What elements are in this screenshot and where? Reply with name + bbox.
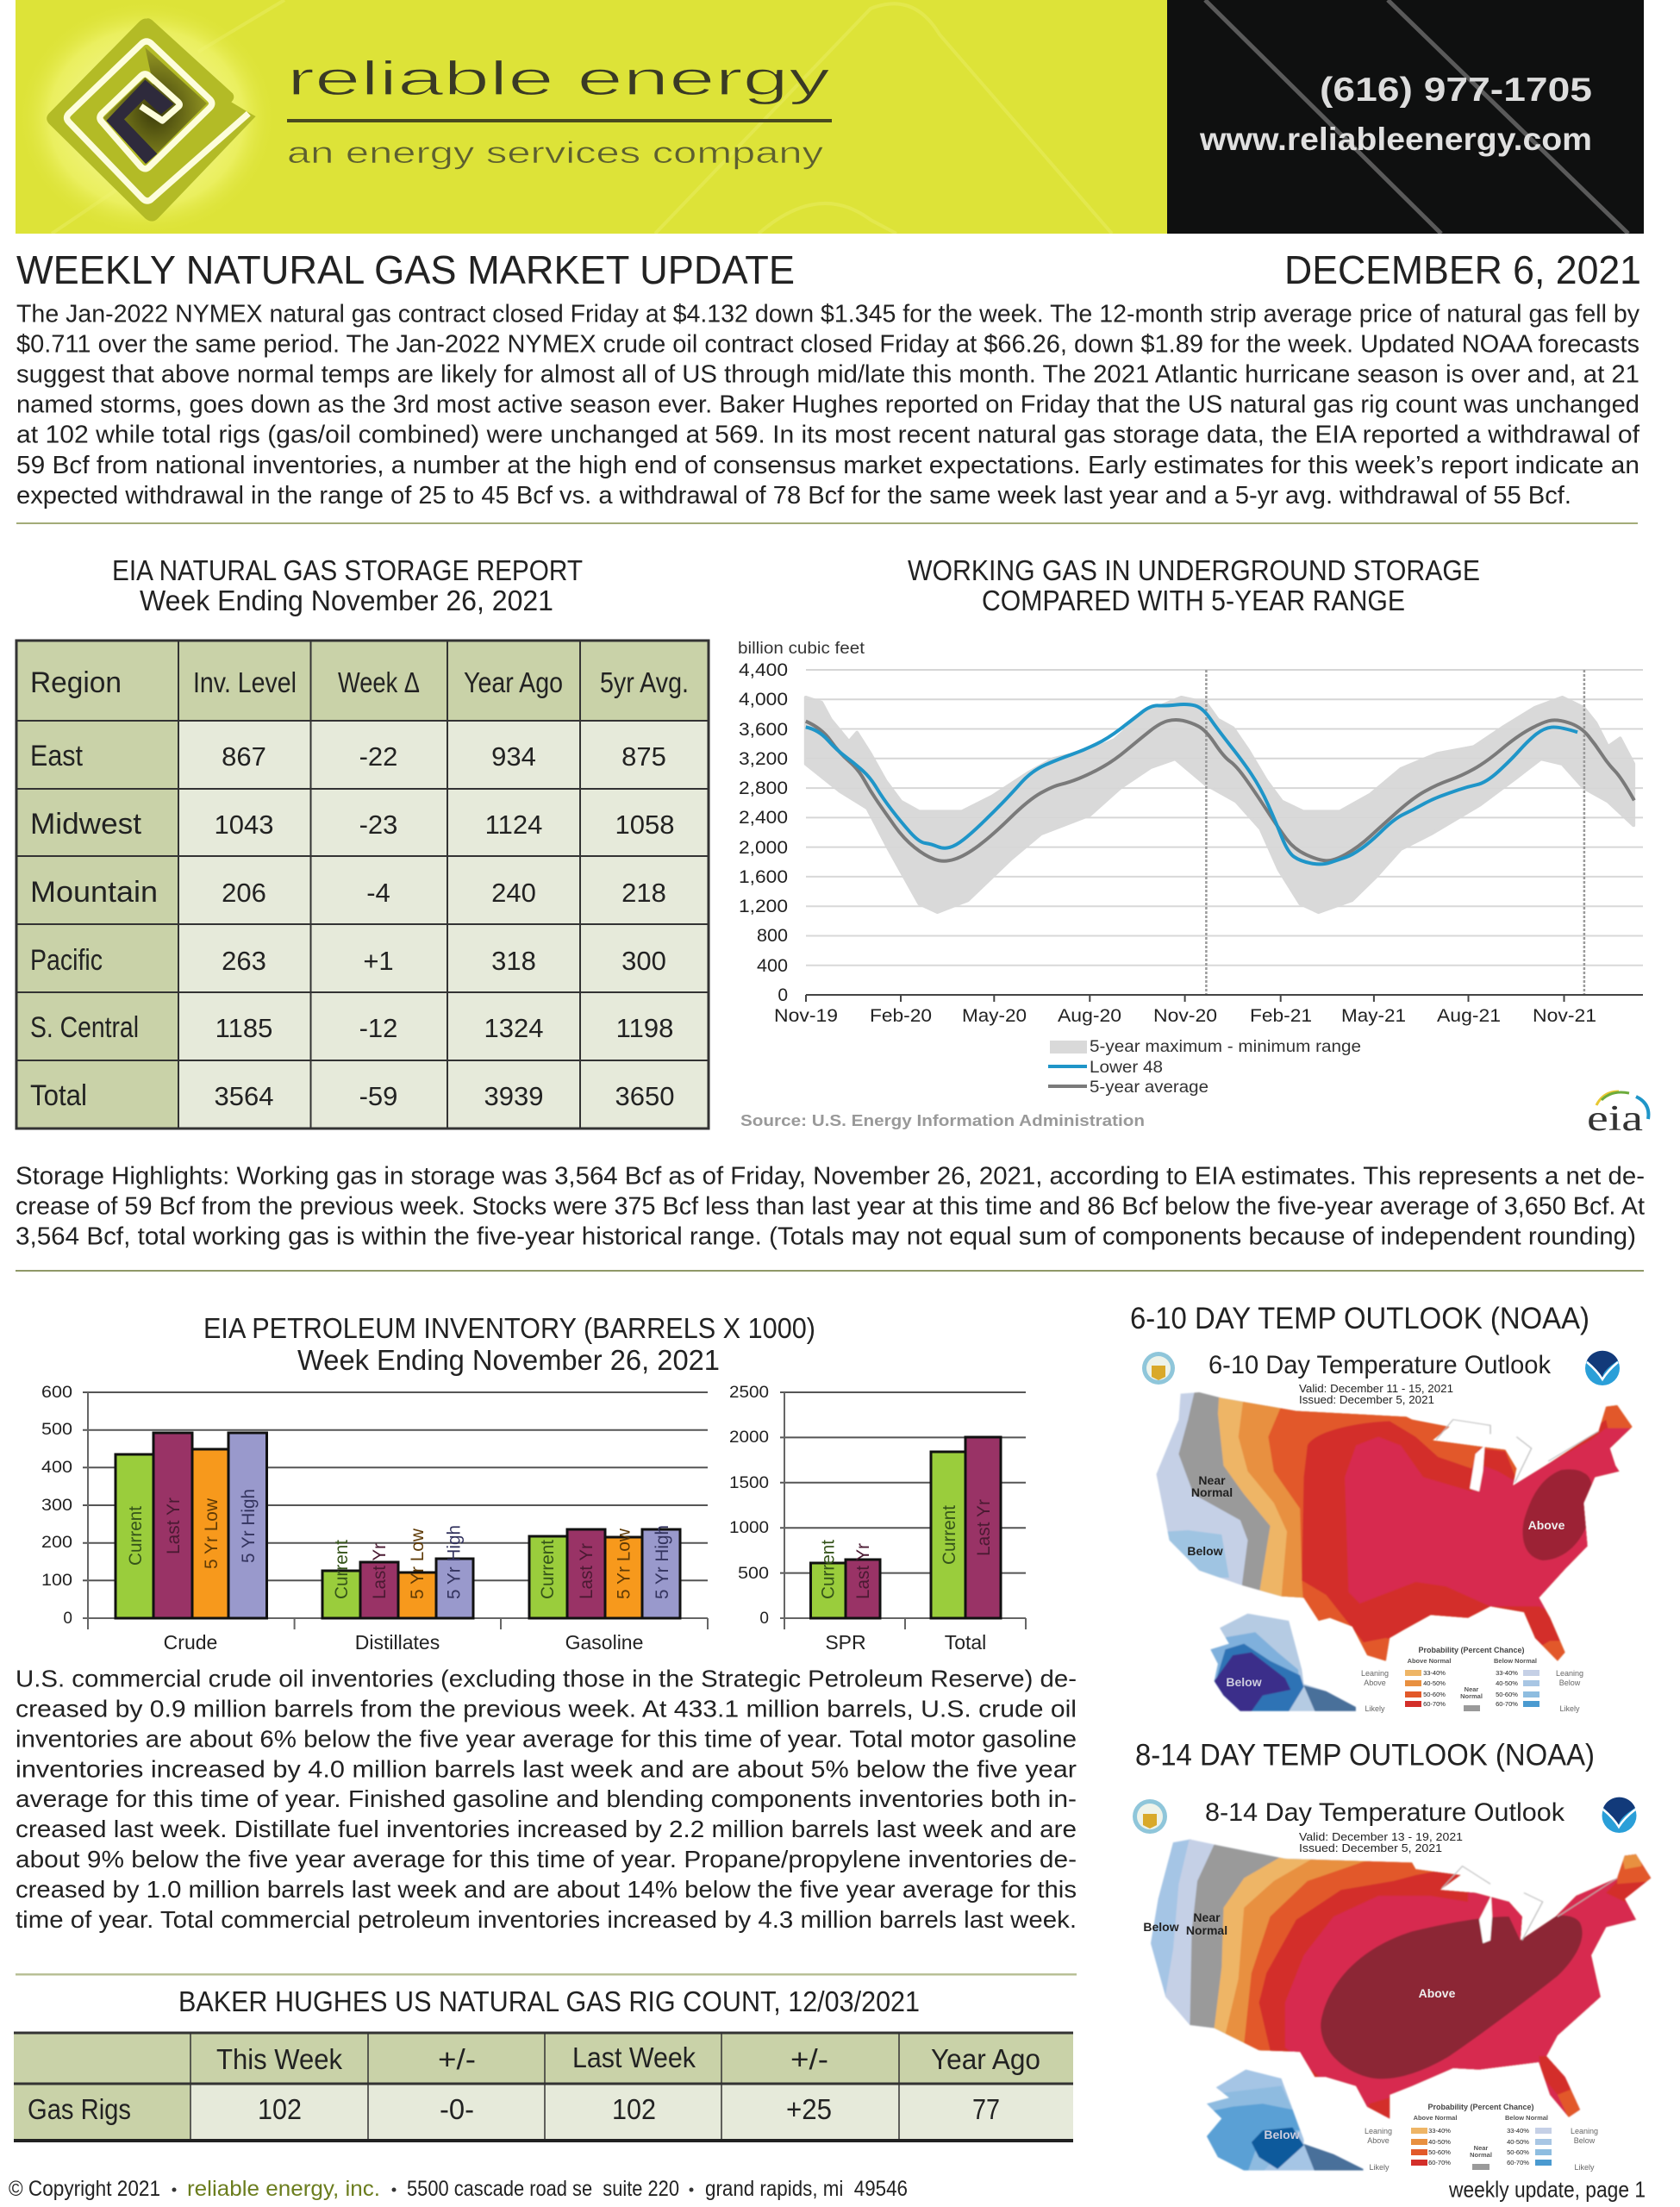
probability legend: Above Normal (1408, 1657, 1451, 1665)
bar labels: Current (332, 1540, 352, 1599)
line chart: working gas (739, 660, 1643, 1026)
probability legend: Near (1465, 1685, 1478, 1693)
axis values (41, 1384, 72, 1628)
y axis unit: billion cubic feet (738, 640, 865, 658)
table header row: 5yr Avg. (600, 666, 689, 698)
storage highlights text: 3,564 Bcf, total working gas is within the five-year historical range. (Totals may not equal sum of components because of independent rounding) (16, 1222, 1636, 1250)
y axis labels: 3,200 (739, 749, 788, 769)
chart legend (1048, 1038, 1361, 1097)
map labels: Below (1264, 2128, 1300, 2141)
bars: crude (116, 1433, 267, 1618)
probability legend: 40-50% (1496, 1679, 1518, 1687)
bar labels: Last Yr (164, 1497, 184, 1554)
row: S. Central: 1198 (616, 1013, 673, 1043)
footer: copyright and address (9, 2177, 908, 2201)
header banner (16, 0, 1644, 235)
storage highlights text: crease of 59 Bcf from the previous week. Stocks were 375 Bcf less than last year at this time and 86 Bcf below the five-year average of 3,650 Bcf. At (16, 1193, 1645, 1221)
map labels (1187, 1473, 1565, 1689)
tagline: an energy services company (287, 136, 824, 170)
petroleum commentary text: creased by 0.9 million barrels from the previous week. At 433.1 million barrels, U.S. crude oil (16, 1695, 1077, 1722)
probability legend: Probability (Percent Chance) (1427, 2103, 1534, 2111)
map title: 6-10 Day Temperature Outlook (1208, 1351, 1552, 1379)
probability legend: 60-70% (1507, 2159, 1529, 2166)
table header row: +/- (438, 2043, 476, 2075)
axis values: 2500 (729, 1384, 769, 1402)
bar labels: 5 Yr Low (202, 1497, 222, 1569)
map labels: Normal (1191, 1485, 1233, 1499)
probability legend: 40-50% (1507, 2138, 1529, 2146)
map labels: Normal (1186, 1923, 1227, 1937)
probability legend: 33-40% (1428, 2127, 1451, 2135)
probability legend: 60-70% (1428, 2159, 1451, 2166)
row: East (30, 740, 666, 772)
row: Gas Rigs: +25 (786, 2093, 832, 2125)
row: Mountain: 206 (222, 878, 266, 908)
petroleum heading: Week Ending November 26, 2021 (297, 1344, 720, 1376)
map labels: Near (1193, 1910, 1221, 1924)
table header row: Inv. Level (193, 666, 297, 698)
bar chart: SPR and total (729, 1384, 1026, 1654)
probability legend: Near (1474, 2144, 1488, 2152)
probability legend: Normal (1460, 1692, 1483, 1700)
petroleum heading (203, 1312, 815, 1376)
bar labels: 5 Yr High (653, 1525, 672, 1599)
valid and issued dates: Valid: December 11 - 15, 2021 (1299, 1382, 1453, 1395)
phone number: (616) 977-1705 (1320, 72, 1592, 109)
probability legend: 33-40% (1507, 2127, 1529, 2135)
map labels: Below (1187, 1544, 1223, 1558)
axis values: 1500 (729, 1474, 769, 1492)
rig count table (14, 2033, 1073, 2142)
chart heading (908, 554, 1480, 616)
bar labels: Current (126, 1506, 146, 1566)
bars: total (931, 1437, 1001, 1618)
bar labels: 5 Yr Low (614, 1528, 634, 1599)
petroleum commentary text: U.S. commercial crude oil inventories (excluding those in the Strategic Petroleum Reserve) de- (16, 1666, 1077, 1692)
probability legend: 60-70% (1423, 1700, 1446, 1708)
Lower 48 line (806, 704, 1577, 864)
row: Gas Rigs: 102 (612, 2093, 656, 2125)
row: East: -22 (359, 741, 397, 772)
row: Pacific: 318 (491, 946, 536, 976)
table header row: Year Ago (464, 666, 563, 698)
valid and issued dates (1299, 1830, 1463, 1854)
probability legend: Below Normal (1494, 1657, 1537, 1665)
chart heading: WORKING GAS IN UNDERGROUND STORAGE (908, 554, 1480, 586)
probability legend: Below (1559, 1679, 1581, 1687)
row: Total (30, 1079, 674, 1112)
x axis labels: Nov-21 (1533, 1006, 1596, 1026)
row: Gas Rigs (28, 2093, 1000, 2125)
x axis labels: Feb-20 (870, 1006, 932, 1026)
table header row: Week Δ (338, 666, 420, 698)
storage highlights text: Storage Highlights: Working gas in storage was 3,564 Bcf as of Friday, November 26, 2021, according to EIA estimates. This represents a net de- (16, 1162, 1645, 1190)
icon: NOAA logo (1602, 1797, 1636, 1833)
row: Pacific (30, 944, 666, 977)
yellow-green logo panel (16, 0, 1167, 234)
bar labels: Current (819, 1540, 839, 1599)
row: S. Central: -12 (359, 1013, 397, 1043)
probability legend: Likely (1369, 2163, 1390, 2172)
row: Midwest: 1058 (615, 810, 674, 840)
bar labels: Current (538, 1540, 558, 1599)
row: S. Central: 1324 (484, 1013, 543, 1043)
gas range band (806, 697, 1633, 912)
table header row: +/- (790, 2043, 828, 2075)
petroleum commentary text: about 9% below the five year average for this time of year. Propane/propylene inventories de- (16, 1846, 1077, 1873)
chart legend: 5-year average (1090, 1078, 1208, 1097)
panel: 6-10 day outlook (1130, 1302, 1655, 1713)
x axis labels: May-20 (962, 1006, 1027, 1026)
source note: Source: U.S. Energy Information Administration (740, 1112, 1145, 1129)
probability legend: Above (1364, 1679, 1386, 1687)
row: East: 867 (222, 741, 266, 772)
category labels: Distillates (355, 1631, 440, 1654)
5-year average line (806, 720, 1634, 861)
map labels: Near (1198, 1473, 1226, 1487)
probability legend: Probability (Percent Chance) (1418, 1646, 1525, 1654)
y axis labels: 800 (757, 926, 788, 946)
row: Gas Rigs: 102 (258, 2093, 302, 2125)
panel: rig count (14, 1985, 1073, 2142)
bar labels: Last Yr (974, 1499, 994, 1556)
map title: 8-14 Day Temperature Outlook (1205, 1798, 1565, 1827)
probability legend: Above (1367, 2136, 1390, 2145)
chart heading: COMPARED WITH 5-YEAR RANGE (982, 585, 1405, 616)
storage table heading: EIA NATURAL GAS STORAGE REPORT (112, 554, 583, 586)
footer: copyright and address: 5500 cascade road se suite 220 (407, 2177, 679, 2201)
row: S. Central: S. Central (30, 1011, 139, 1044)
category labels: Crude (164, 1631, 217, 1654)
probability legend: 40-50% (1428, 2138, 1451, 2146)
bars: gasoline (529, 1529, 680, 1618)
y axis labels: 2,800 (739, 778, 788, 798)
bar labels: Current (940, 1505, 959, 1565)
category labels (164, 1631, 643, 1654)
axis values: 0 (63, 1610, 72, 1628)
y axis labels (739, 660, 788, 1005)
table header row: Year Ago (931, 2043, 1040, 2075)
logo mark (17, 0, 276, 235)
petroleum commentary text: inventories are about 6% below the five year average for this time of year. Total motor gasoline (16, 1725, 1077, 1752)
map labels (1143, 1910, 1456, 2141)
y axis labels: 400 (757, 956, 788, 976)
bar labels: 5 Yr High (239, 1489, 259, 1563)
y axis labels: 1,600 (739, 867, 788, 887)
petroleum commentary text: creased by 1.0 million barrels last week and are about 14% below the five year average for this (16, 1876, 1077, 1903)
table header row (216, 2041, 1040, 2075)
row: Pacific: Pacific (30, 944, 103, 977)
US temperature map (1132, 1830, 1655, 2172)
row: Midwest: Midwest (30, 808, 142, 841)
name underline (287, 119, 832, 122)
row: Pacific: +1 (363, 946, 394, 976)
probability legend: Leaning (1571, 2127, 1598, 2135)
map labels: Below (1226, 1675, 1262, 1689)
row: Mountain: 240 (491, 878, 536, 908)
petroleum commentary text: inventories increased by 4.0 million barrels last week and are about 5% below the five year (16, 1755, 1077, 1782)
row: Pacific: 300 (621, 946, 666, 976)
axis values: 1000 (729, 1519, 769, 1537)
bar labels: Last Yr (577, 1543, 596, 1599)
row: Pacific: 263 (222, 946, 266, 976)
row: East: 875 (621, 741, 666, 772)
bar labels: Last Yr (370, 1543, 390, 1599)
icon: EIA logo (1587, 1091, 1648, 1139)
y axis labels: 4,000 (739, 690, 788, 710)
panel: working gas chart (738, 554, 1648, 1139)
bars: distillates (322, 1559, 473, 1618)
y axis labels: 2,400 (739, 808, 788, 828)
y axis labels: 0 (778, 985, 788, 1005)
axis values: 100 (41, 1572, 72, 1590)
storage table (16, 641, 709, 1129)
x axis labels: Feb-21 (1250, 1006, 1312, 1026)
probability legend: Leaning (1365, 2127, 1392, 2135)
bar chart: commercial inventories (41, 1384, 708, 1654)
bars: SPR (810, 1560, 880, 1618)
storage table heading (112, 554, 583, 616)
row: Midwest: 1124 (485, 810, 542, 840)
valid and issued dates: Issued: December 5, 2021 (1299, 1841, 1442, 1854)
axis values: 500 (41, 1421, 72, 1439)
row: Mountain: Mountain (30, 876, 158, 909)
probability legend (1361, 1646, 1583, 1713)
Alaska inset (1203, 2068, 1367, 2172)
table header row (30, 666, 689, 699)
x axis labels (774, 1006, 1596, 1026)
row: Total: 3564 (215, 1081, 273, 1111)
row: Total: Total (30, 1079, 87, 1112)
report date: DECEMBER 6, 2021 (1284, 247, 1641, 292)
market summary text: named storms, goes down as the 3rd most active season ever. Baker Hughes reported on Friday that the US natural gas rig count was unchanged (16, 391, 1639, 419)
x axis labels: May-21 (1341, 1006, 1406, 1026)
probability legend: 50-60% (1496, 1691, 1518, 1698)
axis values: 300 (41, 1497, 72, 1515)
y axis labels: 1,200 (739, 897, 788, 916)
probability legend: Likely (1559, 1704, 1580, 1713)
probability legend: Below Normal (1505, 2114, 1548, 2122)
category labels: Total (945, 1631, 986, 1654)
row: Total: 3650 (615, 1081, 674, 1111)
rig count heading: BAKER HUGHES US NATURAL GAS RIG COUNT, 12/03/2021 (178, 1985, 920, 2017)
US temperature map (1156, 1391, 1633, 1712)
probability legend: Above Normal (1414, 2114, 1457, 2122)
row: Total: 3939 (484, 1081, 543, 1111)
table header row: Last Week (572, 2041, 696, 2073)
map labels: Above (1528, 1518, 1565, 1532)
page number: weekly update, page 1 (1448, 2176, 1646, 2202)
map labels: Below (1143, 1920, 1179, 1934)
probability legend: Likely (1365, 1704, 1385, 1713)
bar labels: Last Yr (853, 1543, 873, 1599)
icon: Commerce seal (1142, 1352, 1175, 1385)
row: Midwest (30, 808, 674, 841)
market summary text: $0.711 over the same period. The Jan-2022 NYMEX crude oil contract closed Friday at $66.26, down $1.89 for the week. Updated NOAA forecasts (16, 331, 1639, 359)
probability legend: Likely (1574, 2163, 1595, 2172)
y axis labels: 3,600 (739, 720, 788, 740)
market summary text: at 102 while total rigs (gas/oil combined) were unchanged at 569. In its most recent natural gas storage data, the EIA reported a withdrawal of (16, 421, 1640, 448)
market summary text (16, 300, 1640, 510)
probability legend: 50-60% (1428, 2148, 1451, 2156)
probability legend: 33-40% (1423, 1669, 1446, 1677)
valid and issued dates: Valid: December 13 - 19, 2021 (1299, 1830, 1463, 1843)
bar labels: 5 Yr Low (408, 1528, 428, 1599)
Alaska inset (1210, 1613, 1357, 1712)
petroleum commentary text: creased last week. Distillate fuel inventories increased by 2.2 million barrels last week and are (16, 1816, 1077, 1842)
x axis labels: Aug-21 (1437, 1006, 1501, 1026)
website: www.reliableenergy.com (1199, 122, 1592, 157)
panel: petroleum inventory (16, 1312, 1077, 1933)
valid and issued dates (1299, 1382, 1453, 1406)
probability legend: 60-70% (1496, 1700, 1518, 1708)
main title: WEEKLY NATURAL GAS MARKET UPDATE (16, 247, 795, 292)
row: S. Central (30, 1011, 673, 1044)
petroleum commentary text (16, 1666, 1077, 1933)
petroleum heading: EIA PETROLEUM INVENTORY (BARRELS X 1000) (203, 1312, 815, 1344)
bar labels (819, 1499, 994, 1599)
market summary text: suggest that above normal temps are likely for almost all of US through mid/late this month. The 2021 Atlantic hurricane season is over and, at 21 (16, 360, 1639, 388)
row: Total: -59 (359, 1081, 397, 1111)
axis values: 500 (738, 1565, 769, 1583)
category labels: SPR (825, 1631, 866, 1654)
row: S. Central: 1185 (215, 1013, 272, 1043)
y axis labels: 2,000 (739, 838, 788, 858)
table header row: This Week (216, 2043, 342, 2075)
outlook heading: 6-10 DAY TEMP OUTLOOK (NOAA) (1130, 1302, 1589, 1335)
chart legend: 5-year maximum - minimum range (1090, 1038, 1361, 1056)
axis values: 2000 (729, 1429, 769, 1447)
probability legend: 33-40% (1496, 1669, 1518, 1677)
axis values: 600 (41, 1384, 72, 1402)
footer: copyright and address: © Copyright 2021 (9, 2177, 160, 2201)
footer: copyright and address: grand rapids, mi 49546 (705, 2177, 908, 2201)
probability legend (1365, 2103, 1598, 2172)
category labels (825, 1631, 986, 1654)
panel: EIA storage report (16, 554, 709, 1129)
petroleum commentary text: time of year. Total commercial petroleum inventories increased by 4.3 million barrels last week. (16, 1906, 1077, 1933)
row: East: East (30, 740, 83, 772)
x axis labels: Aug-20 (1058, 1006, 1121, 1026)
petroleum commentary text: average for this time of year. Finished gasoline and blending components inventories both in- (16, 1785, 1077, 1812)
chart legend: Lower 48 (1090, 1059, 1163, 1077)
probability legend: Normal (1470, 2151, 1492, 2159)
x axis labels: Nov-19 (774, 1006, 838, 1026)
axis values (729, 1384, 769, 1628)
x axis labels: Nov-20 (1153, 1006, 1217, 1026)
storage table heading: Week Ending November 26, 2021 (140, 585, 553, 616)
outlook heading: 8-14 DAY TEMP OUTLOOK (NOAA) (1135, 1738, 1595, 1772)
valid and issued dates: Issued: December 5, 2021 (1299, 1393, 1434, 1406)
category labels: Gasoline (565, 1631, 643, 1654)
map labels: Above (1419, 1986, 1456, 2000)
y axis labels: 4,400 (739, 660, 788, 680)
row: Midwest: 1043 (215, 810, 273, 840)
icon: NOAA logo (1585, 1351, 1620, 1385)
market summary text: expected withdrawal in the range of 25 to 45 Bcf vs. a withdrawal of 78 Bcf for the same week last year and a 5-yr avg. withdrawal of 55 Bcf. (16, 482, 1571, 510)
panel: 8-14 day outlook (1132, 1738, 1655, 2172)
axis values: 200 (41, 1534, 72, 1552)
row: Gas Rigs: -0- (440, 2093, 474, 2125)
row: East: 934 (491, 741, 536, 772)
icon: Commerce seal (1133, 1799, 1167, 1834)
probability legend: 40-50% (1423, 1679, 1446, 1687)
row: Mountain (30, 876, 666, 909)
row: Midwest: -23 (359, 810, 397, 840)
market summary text: 59 Bcf from national inventories, a number at the high end of consensus market expectations. Early estimates for this week’s report indicate an (16, 452, 1639, 479)
bar labels (126, 1489, 672, 1599)
probability legend: Below (1574, 2136, 1596, 2145)
bar labels: 5 Yr High (445, 1525, 464, 1599)
market summary text: The Jan-2022 NYMEX natural gas contract closed Friday at $4.132 down $1.345 for the week. The 12-month strip average price of natural gas fell by (16, 300, 1639, 328)
storage highlights text (16, 1162, 1645, 1250)
row: Mountain: -4 (366, 878, 390, 908)
probability legend: Leaning (1556, 1669, 1583, 1678)
company name: reliable energy (287, 51, 830, 105)
probability legend: Leaning (1361, 1669, 1389, 1678)
contact panel (1167, 0, 1644, 234)
row: Gas Rigs: Gas Rigs (28, 2093, 131, 2125)
axis values: 400 (41, 1459, 72, 1477)
table header row: Region (30, 666, 122, 699)
row: Gas Rigs: 77 (972, 2093, 1000, 2125)
row: Mountain: 218 (621, 878, 666, 908)
icon: EIA logo: eia (1587, 1099, 1643, 1139)
axis values: 0 (759, 1610, 769, 1628)
footer: copyright and address: reliable energy, inc. (187, 2177, 380, 2201)
probability legend: 50-60% (1423, 1691, 1446, 1698)
probability legend: 50-60% (1507, 2148, 1529, 2156)
